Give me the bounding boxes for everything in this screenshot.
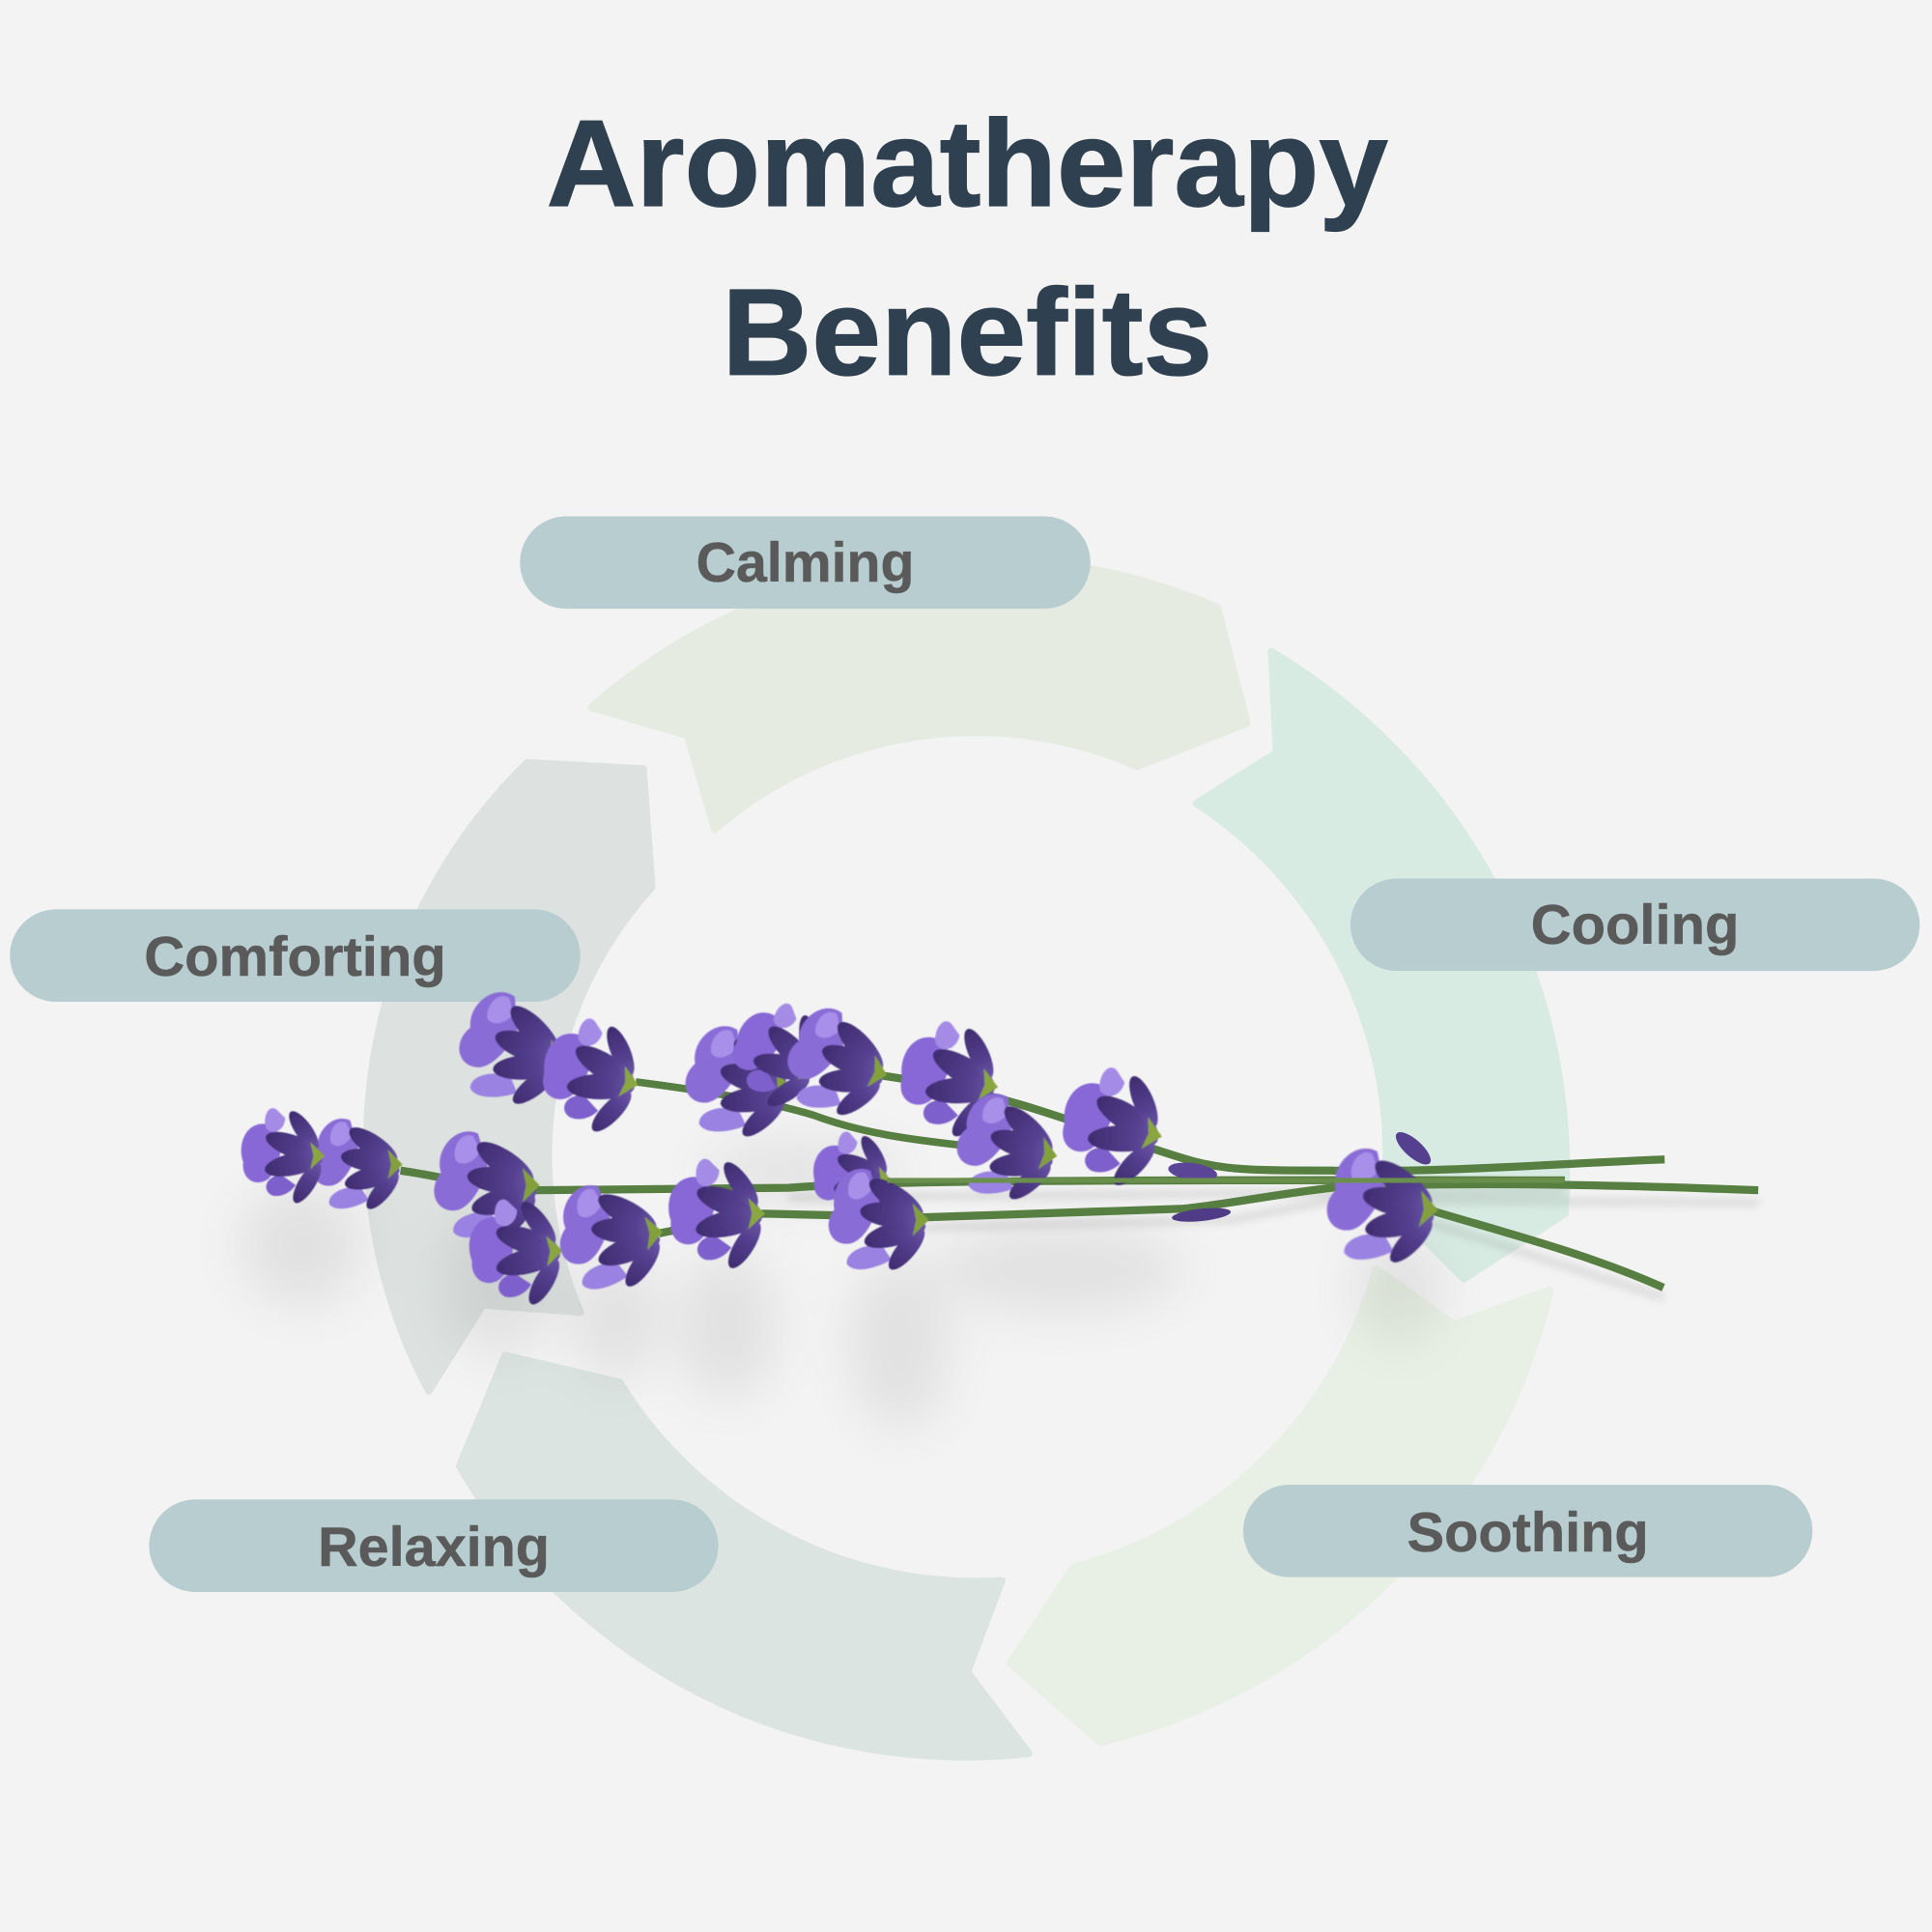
label: comforting: Comforting [144,926,446,988]
flower clusters: upper row [449,985,1443,1271]
title [547,96,1388,402]
label: cooling [1350,878,1919,971]
soft flower shadows [241,1144,1441,1430]
label: cooling: Cooling [1531,895,1739,956]
arrow segment: comforting [367,763,652,1391]
arrow segment: relaxing [460,1355,1029,1757]
circular arrow ring [367,559,1566,1757]
arrow segment: cooling [1197,652,1566,1279]
label: calming: Calming [696,532,914,594]
label: soothing: Soothing [1407,1502,1649,1564]
label: soothing [1243,1485,1812,1577]
title: Aromatherapy [547,96,1388,233]
title: Benefits [722,265,1212,402]
front stem highlight [887,1178,1565,1182]
label: comforting [10,909,581,1002]
label: relaxing [149,1499,719,1592]
label: relaxing: Relaxing [318,1517,550,1578]
arrow segment: calming [591,559,1247,829]
stems [401,1076,1758,1288]
stem shadows [788,1190,1758,1297]
arrow segment: soothing [1010,1269,1550,1743]
lavender sprig [241,985,1758,1430]
label: calming [520,516,1091,609]
flower clusters: lower row [242,1107,930,1311]
